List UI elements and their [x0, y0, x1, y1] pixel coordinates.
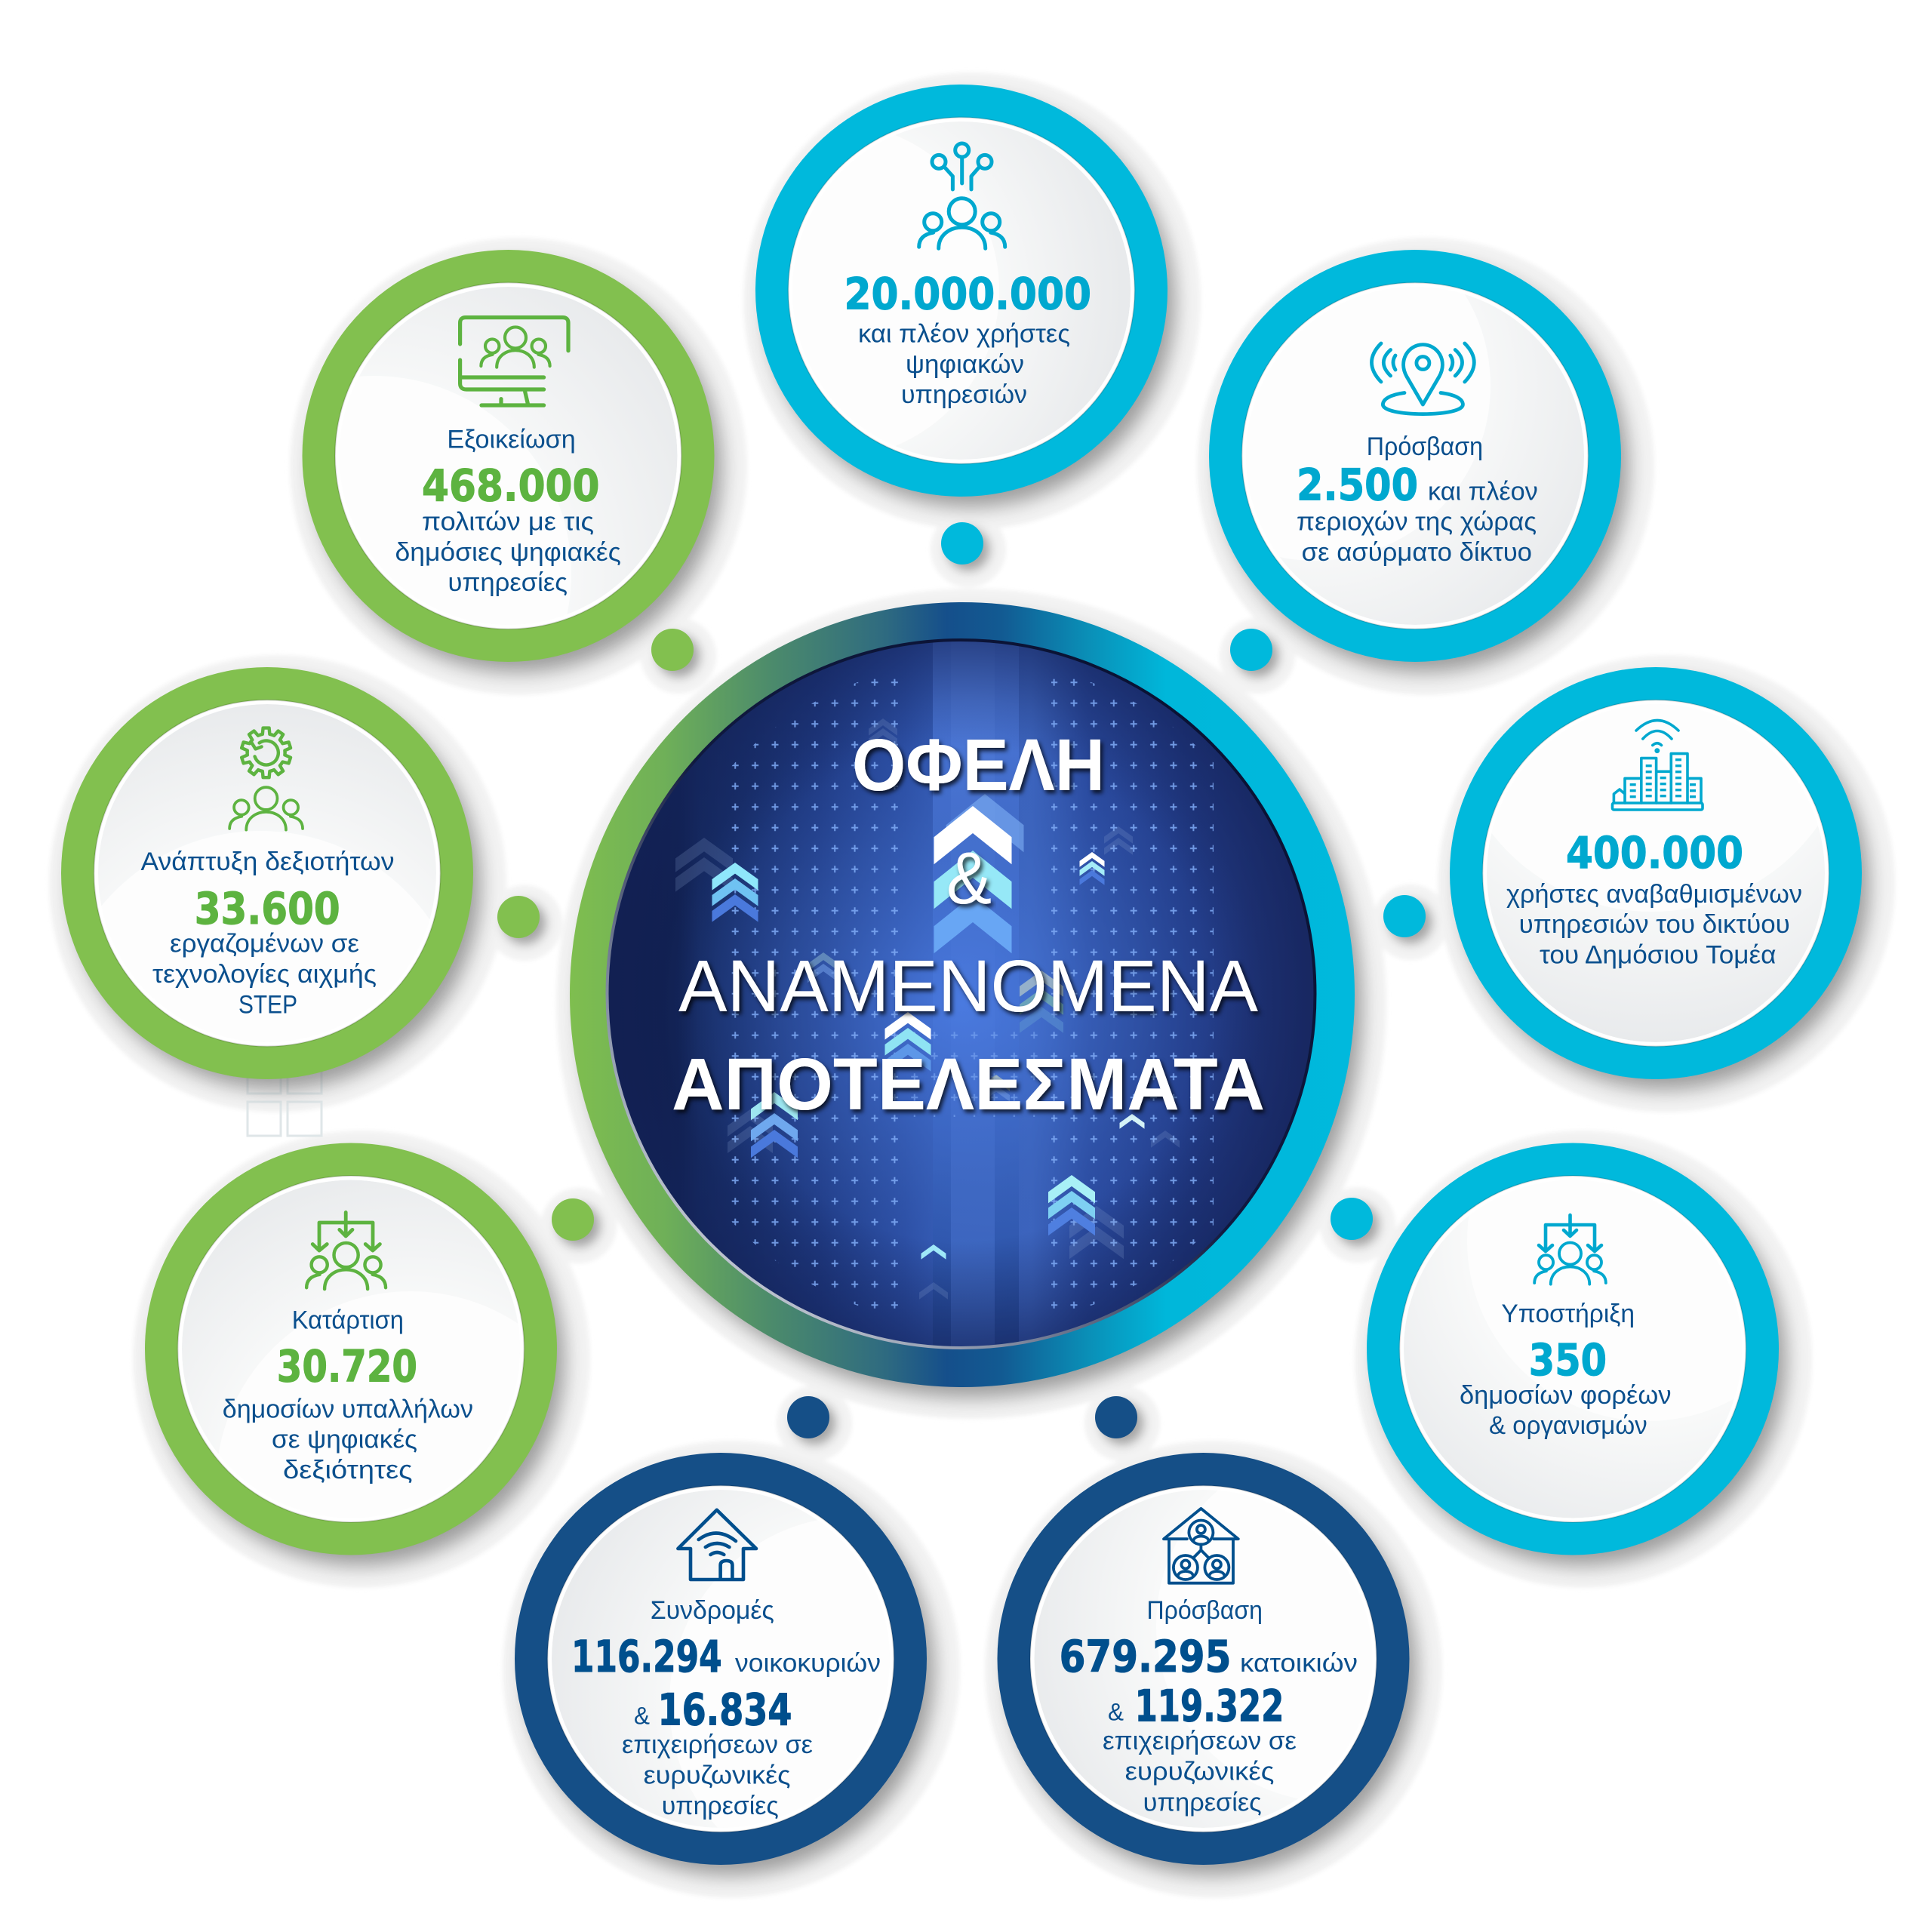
title: ΑΠΟΤΕΛΕΣΜΑΤΑ: ΑΠΟΤΕΛΕΣΜΑΤΑ: [672, 1043, 1265, 1125]
icon: house with wifi: [678, 1510, 756, 1580]
panel: skills development: [59, 667, 494, 1103]
description: πολιτών με τις: [422, 508, 594, 537]
description: εργαζομένων σε: [170, 930, 359, 958]
number: homes: 679.295: [1060, 1631, 1231, 1682]
description: υπηρεσίες: [448, 568, 568, 597]
description: επιχειρήσεων σε: [622, 1730, 813, 1759]
title: ΟΦΕΛΗ: ΟΦΕΛΗ: [852, 724, 1105, 806]
ampersand: &: [1108, 1699, 1124, 1726]
description: και πλέον χρήστες: [858, 320, 1070, 349]
label: Ανάπτυξη δεξιοτήτων: [140, 848, 394, 876]
description: [223, 1395, 473, 1484]
label: Εξοικείωση: [447, 426, 576, 454]
panel: wireless access: [1207, 250, 1641, 685]
glossy disc: [1399, 1060, 1828, 1522]
cyan ring: [1209, 250, 1621, 662]
number: households: 116.294: [571, 1631, 722, 1682]
icon: arrows down to people: [1534, 1215, 1606, 1284]
unit: homes: κατοικιών: [1240, 1649, 1358, 1678]
connector dots around hub: [497, 522, 1432, 1444]
description: [1460, 1381, 1671, 1440]
description: [152, 930, 377, 1020]
description: και πλέον: [1428, 477, 1538, 506]
glossy disc: [788, 116, 1135, 465]
description: [395, 508, 621, 597]
panel: support for public bodies: [1367, 1060, 1828, 1565]
description: περιοχών της χώρας: [1297, 508, 1537, 537]
navy ring: [515, 1453, 927, 1865]
icon: arrows down to people: [306, 1212, 386, 1289]
description: [1506, 880, 1802, 970]
glossy disc: [1482, 699, 1829, 1048]
cyan ring: [1367, 1143, 1779, 1555]
number: businesses: 16.834: [658, 1684, 792, 1736]
panel: upgraded public network users: [1447, 667, 1882, 1103]
panel: public employee training: [143, 1143, 577, 1577]
description: [858, 320, 1070, 409]
title: ΑΝΑΜΕΝΟΜΕΝΑ: ΑΝΑΜΕΝΟΜΕΝΑ: [678, 945, 1258, 1027]
number: 350: [1529, 1334, 1607, 1386]
green ring: [61, 667, 473, 1079]
cyan ring: [755, 85, 1168, 497]
hub background with chevrons and plus grid: [604, 638, 1321, 1351]
description: δημοσίων υπαλλήλων: [223, 1395, 473, 1423]
description: & οργανισμών: [1489, 1411, 1647, 1440]
number: 2.500: [1297, 459, 1418, 510]
glossy disc: [334, 282, 682, 629]
description: επιχειρήσεων σε: [1103, 1727, 1297, 1755]
number: 20.000.000: [844, 269, 1091, 320]
icon: location pin with signals: [1372, 343, 1474, 414]
icon: network above people: [919, 143, 1005, 248]
panel: broadband access: [998, 1447, 1511, 1875]
description: ευρυζωνικές: [1125, 1758, 1274, 1786]
cyan ring: [1450, 667, 1862, 1079]
description: δημοσίων φορέων: [1460, 1381, 1671, 1410]
green ring: [145, 1143, 557, 1555]
description: ευρυζωνικές: [644, 1761, 791, 1789]
description: STEP: [238, 991, 297, 1020]
navy ring: [998, 1453, 1410, 1865]
green ring: [302, 250, 714, 662]
description: [1297, 477, 1538, 567]
description: ψηφιακών: [906, 350, 1024, 379]
number: 468.000: [422, 460, 599, 511]
description: δεξιότητες: [283, 1456, 413, 1484]
title: ampersand: &: [946, 837, 992, 919]
glossy disc: [1030, 1447, 1511, 1832]
label: Πρόσβαση: [1367, 432, 1483, 461]
panel: broadband subscriptions: [515, 1453, 1042, 1889]
description: υπηρεσιών: [901, 380, 1027, 409]
icon: gear and people: [229, 728, 303, 830]
description: υπηρεσίες: [1143, 1788, 1262, 1817]
icon: house with connected people: [1164, 1509, 1238, 1583]
icon: wifi over city buildings: [1612, 720, 1703, 810]
number: 30.720: [277, 1340, 417, 1392]
number: businesses: 119.322: [1135, 1680, 1284, 1731]
faint grid squares behind skills panel: [248, 1066, 321, 1136]
icon: monitor with people: [460, 318, 568, 405]
glossy disc: [94, 699, 441, 1048]
label: Πρόσβαση: [1147, 1596, 1263, 1625]
unit: households: νοικοκυριών: [735, 1649, 881, 1678]
panel: citizen familiarisation: [300, 250, 735, 685]
panel: digital service users: [754, 85, 1187, 519]
ampersand: &: [634, 1702, 650, 1729]
description: σε ψηφιακές: [272, 1426, 417, 1454]
label: Κατάρτιση: [292, 1306, 404, 1335]
hub gradient ring: [570, 602, 1355, 1387]
glossy disc: [548, 1485, 1042, 1889]
number: 400.000: [1566, 827, 1743, 878]
description: τεχνολογίες αιχμής: [152, 960, 377, 989]
glossy disc: [1241, 282, 1589, 629]
glossy disc: [178, 1176, 605, 1681]
number: 33.600: [195, 883, 340, 934]
panel: central hub: [570, 602, 1362, 1398]
description: [622, 1730, 813, 1820]
description: υπηρεσιών του δικτύου: [1519, 910, 1790, 939]
label: Υποστήριξη: [1501, 1300, 1635, 1328]
description: [1103, 1727, 1297, 1817]
description: χρήστες αναβαθμισμένων: [1506, 880, 1802, 909]
label: Συνδρομές: [651, 1596, 774, 1625]
description: υπηρεσίες: [662, 1792, 779, 1820]
description: δημόσιες ψηφιακές: [395, 538, 621, 567]
description: του Δημόσιου Τομέα: [1540, 941, 1777, 970]
description: σε ασύρματο δίκτυο: [1302, 538, 1532, 567]
